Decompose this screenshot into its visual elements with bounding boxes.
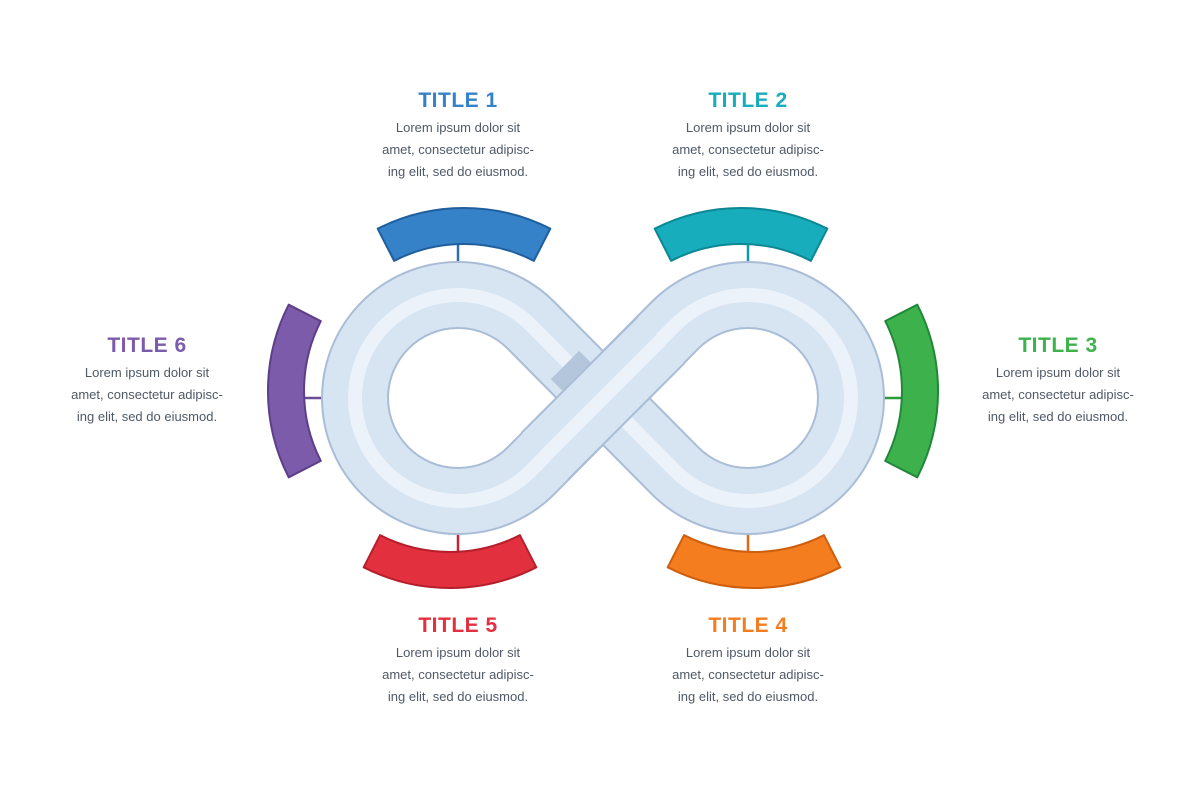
tab 1 bbox=[378, 208, 550, 261]
text: title 3: Lorem ipsum dolor sit bbox=[996, 365, 1120, 380]
text: title 2: ing elit, sed do eiusmod. bbox=[678, 164, 818, 179]
text: title 6: ing elit, sed do eiusmod. bbox=[77, 409, 217, 424]
text: title 6: Lorem ipsum dolor sit bbox=[85, 365, 209, 380]
text: title 4: ing elit, sed do eiusmod. bbox=[678, 689, 818, 704]
tab 5 bbox=[364, 535, 536, 588]
text: title 6: amet, consectetur adipisc- bbox=[71, 387, 223, 402]
text: title 5: Lorem ipsum dolor sit bbox=[396, 645, 520, 660]
text: title 3: ing elit, sed do eiusmod. bbox=[988, 409, 1128, 424]
tab 2 bbox=[655, 208, 827, 261]
text: title 2 bbox=[672, 89, 824, 179]
tab 4 bbox=[668, 535, 840, 588]
text: title 6: TITLE 6 bbox=[107, 334, 187, 357]
text: title 1: Lorem ipsum dolor sit bbox=[396, 120, 520, 135]
text: title 2: TITLE 2 bbox=[708, 89, 788, 112]
text: title 5: amet, consectetur adipisc- bbox=[382, 667, 534, 682]
tab 6 bbox=[268, 305, 321, 477]
connector lines bbox=[300, 240, 906, 556]
text: title 6 bbox=[71, 334, 223, 424]
text: title 1: TITLE 1 bbox=[418, 89, 498, 112]
text: title 1 bbox=[382, 89, 534, 179]
text: title 5: ing elit, sed do eiusmod. bbox=[388, 689, 528, 704]
text: title 3 bbox=[982, 334, 1134, 424]
infinity band bbox=[355, 295, 851, 501]
text: title 2: Lorem ipsum dolor sit bbox=[686, 120, 810, 135]
text: title 1: amet, consectetur adipisc- bbox=[382, 142, 534, 157]
text: title 3: amet, consectetur adipisc- bbox=[982, 387, 1134, 402]
text: title 2: amet, consectetur adipisc- bbox=[672, 142, 824, 157]
text: title 4: amet, consectetur adipisc- bbox=[672, 667, 824, 682]
text: title 5: TITLE 5 bbox=[418, 614, 498, 637]
text: title 3: TITLE 3 bbox=[1018, 334, 1098, 357]
text: title 4 bbox=[672, 614, 824, 704]
text: title 1: ing elit, sed do eiusmod. bbox=[388, 164, 528, 179]
text: title 5 bbox=[382, 614, 534, 704]
text: title 4: TITLE 4 bbox=[708, 614, 788, 637]
text: title 4: Lorem ipsum dolor sit bbox=[686, 645, 810, 660]
tab 3 bbox=[885, 305, 938, 477]
